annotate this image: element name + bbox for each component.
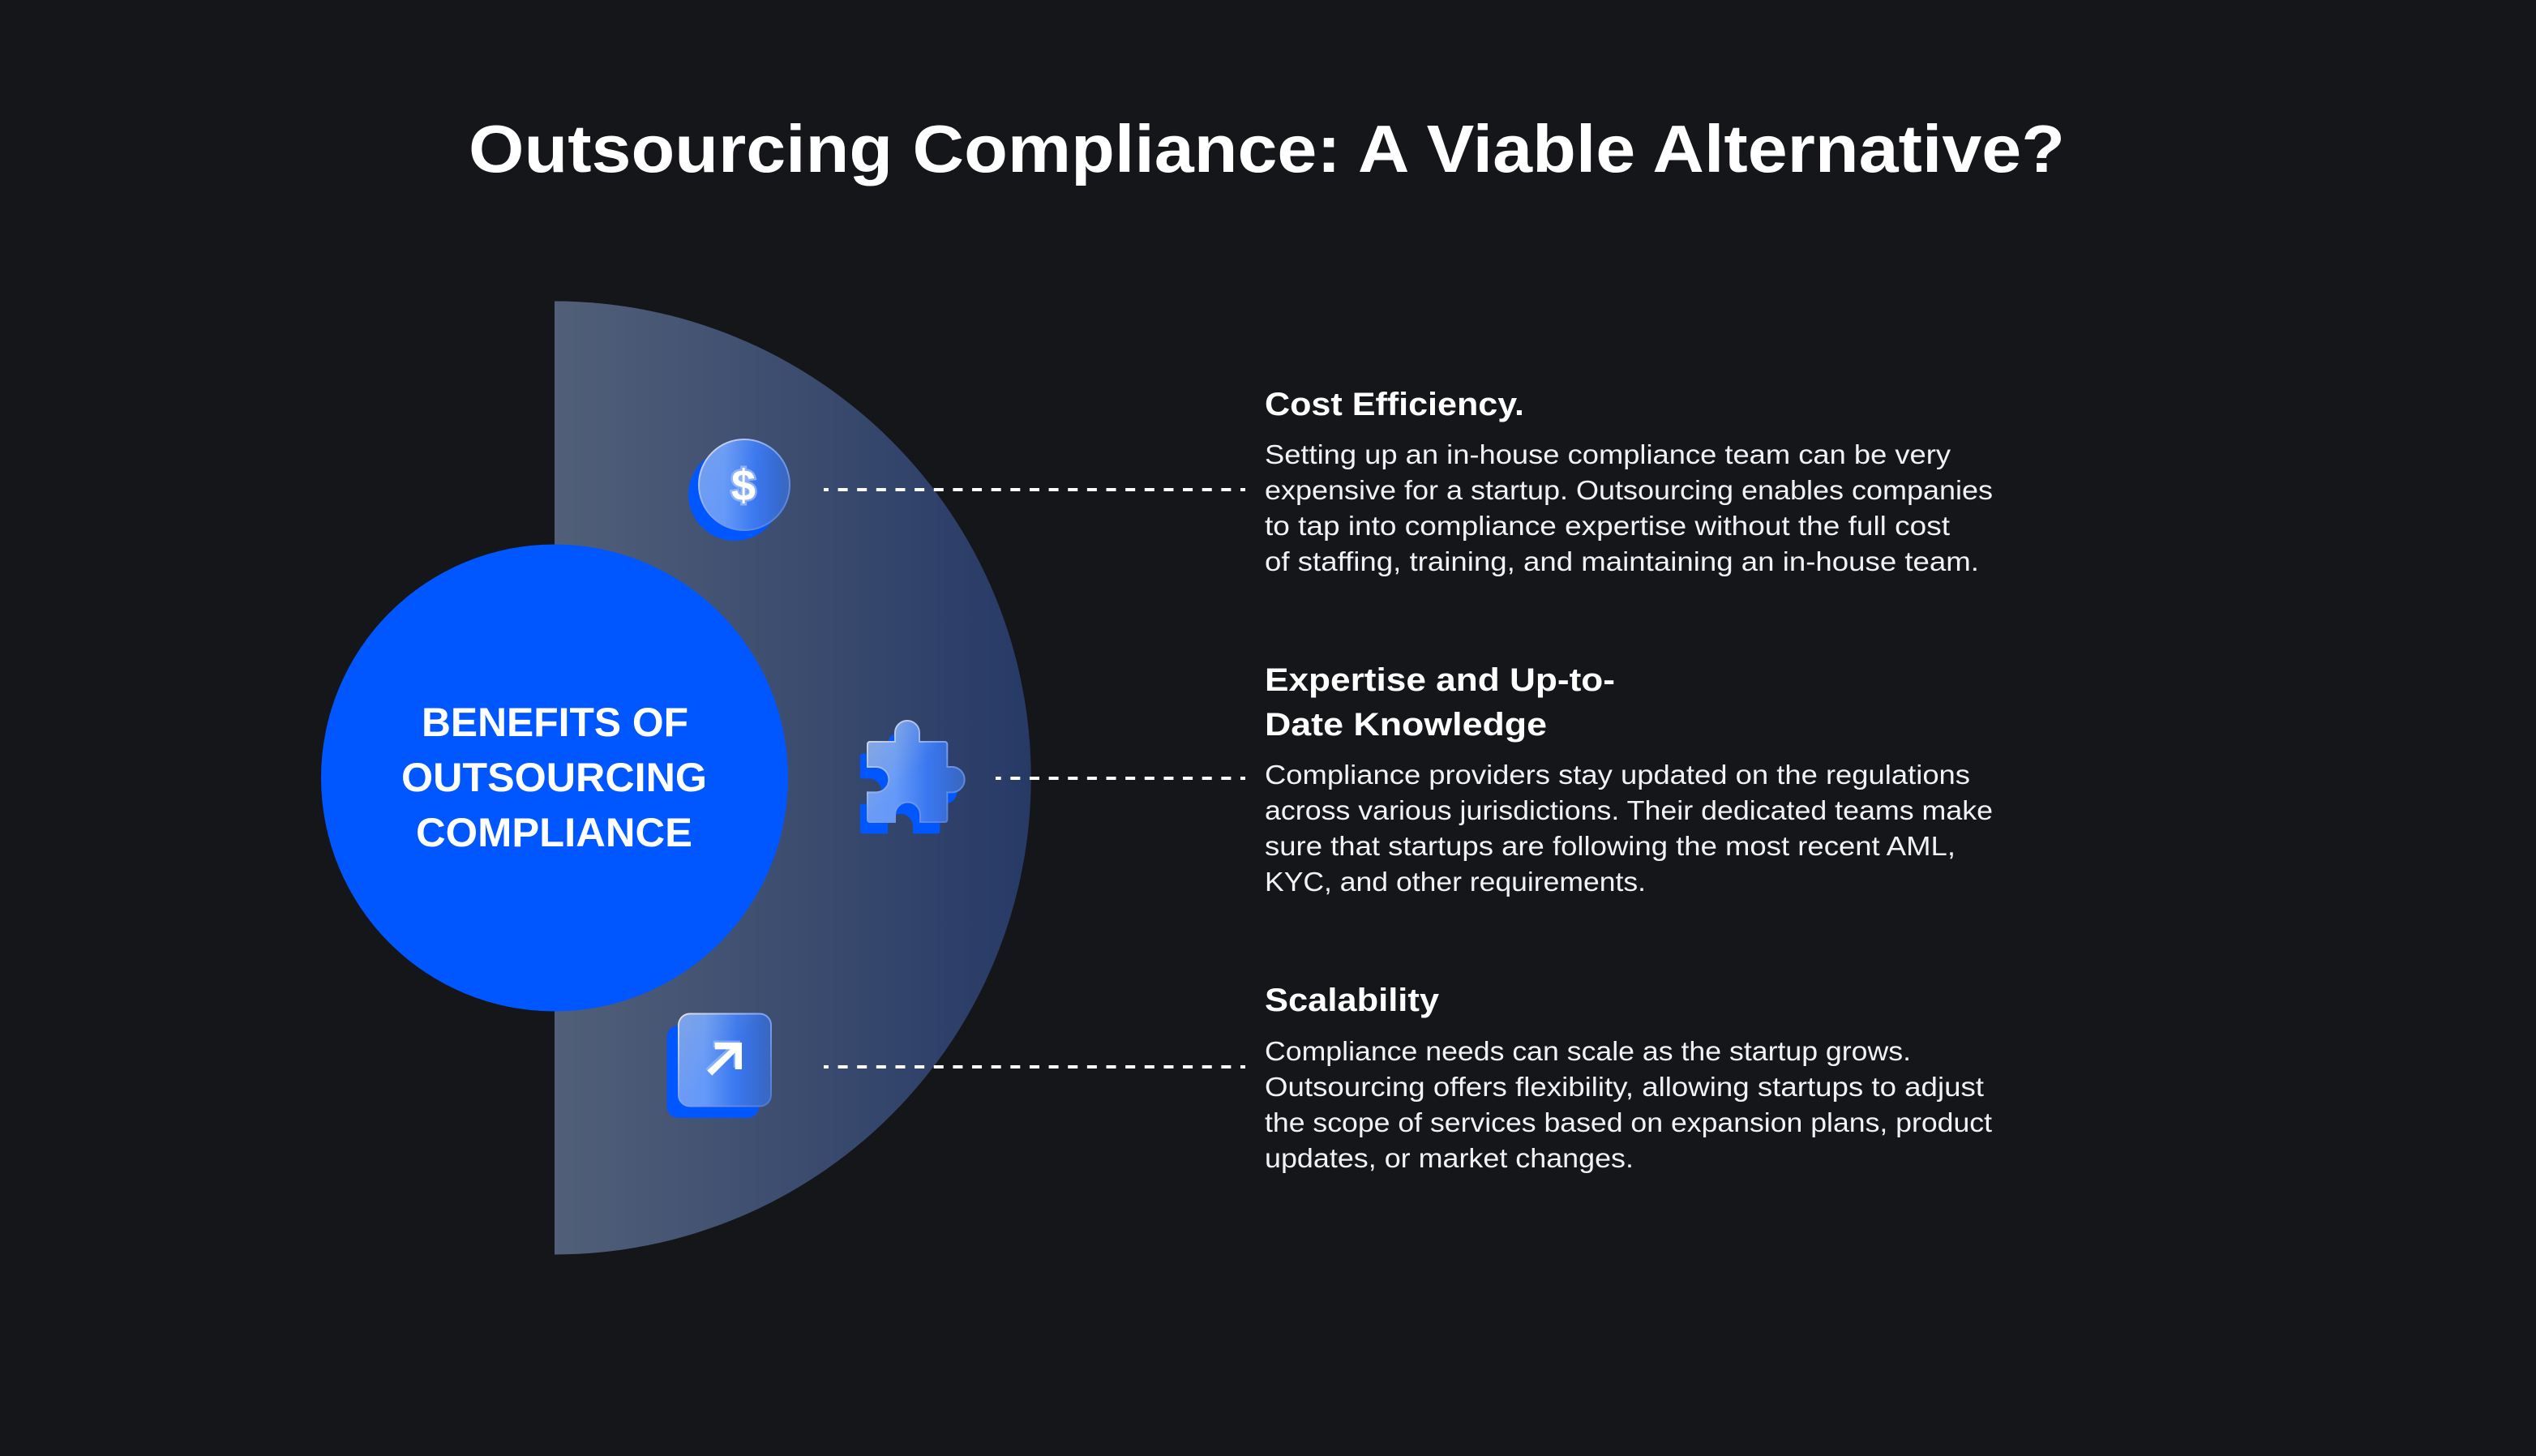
body: expertise: Compliance providers stay updated on the regulations [1265, 760, 1970, 790]
heading: expertise: Date Knowledge [1265, 707, 1547, 743]
circle heading: OUTSOURCING [401, 755, 707, 800]
panel: half disc [555, 302, 1031, 1255]
body: scalability: Outsourcing offers flexibility, allowing startups to adjust [1265, 1072, 1984, 1102]
heading: expertise [1265, 662, 1615, 743]
body: cost efficiency: of staffing, training, and maintaining an in-house team. [1265, 546, 1979, 576]
title: Outsourcing Compliance: A Viable Alternative? [469, 111, 2065, 186]
body: expertise: across various jurisdictions. Their dedicated teams make [1265, 795, 1993, 825]
icon: dollar coin [688, 439, 790, 541]
connector: scalability [824, 1065, 1245, 1068]
icon: dollar coin: $ [731, 461, 756, 510]
heading: expertise: Expertise and Up-to- [1265, 662, 1615, 698]
circle heading: COMPLIANCE [416, 810, 692, 855]
body: cost efficiency [1265, 439, 1993, 576]
circle heading: BENEFITS OF [422, 700, 688, 745]
body: cost efficiency: to tap into compliance expertise without the full cost [1265, 511, 1950, 541]
text block: cost efficiency [1265, 387, 1993, 576]
body: scalability: the scope of services based on expansion plans, product [1265, 1107, 1992, 1137]
body: expertise: sure that startups are following the most recent AML, [1265, 831, 1956, 861]
panel: central circle [321, 545, 788, 1012]
connector: cost efficiency [824, 488, 1245, 491]
body: expertise: KYC, and other requirements. [1265, 867, 1646, 897]
body: scalability [1265, 1036, 1992, 1173]
body: cost efficiency: expensive for a startup. Outsourcing enables companies [1265, 475, 1993, 505]
text block: scalability [1265, 983, 1992, 1173]
icon: puzzle piece [860, 721, 965, 833]
heading: cost efficiency: Cost Efficiency. [1265, 387, 1524, 422]
heading: scalability: Scalability [1265, 983, 1440, 1018]
body: cost efficiency: Setting up an in-house compliance team can be very [1265, 439, 1951, 469]
body: scalability: Compliance needs can scale as the startup grows. [1265, 1036, 1911, 1066]
icon: growth arrow [666, 1013, 771, 1118]
circle heading [401, 700, 707, 855]
body: scalability: updates, or market changes. [1265, 1143, 1634, 1173]
text block: expertise [1265, 662, 1993, 897]
connector: expertise [996, 777, 1245, 780]
body: expertise [1265, 760, 1993, 897]
